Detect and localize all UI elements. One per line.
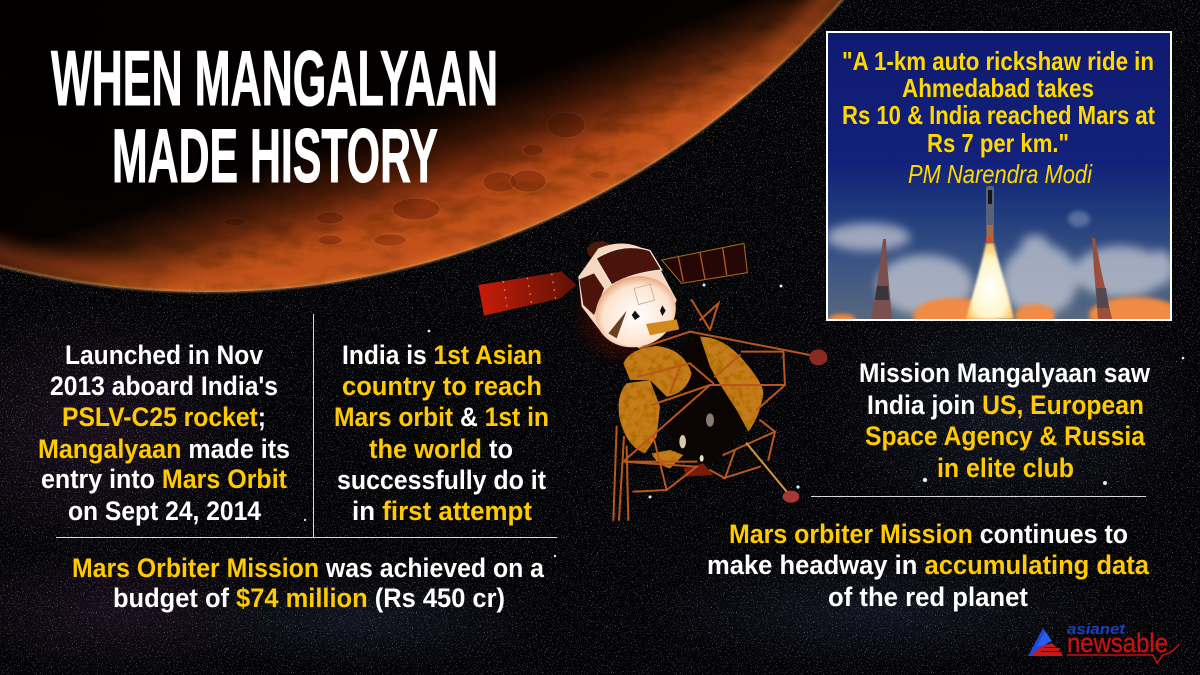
- launch photo: clouds, towers, rocket: [828, 186, 1170, 319]
- text block: launch: on Sept 24, 2014: [68, 496, 261, 526]
- landing frame and legs: [613, 300, 810, 520]
- quote text: [842, 46, 1155, 158]
- landing pads: [783, 349, 827, 503]
- text block: first Asian country: India is 1st Asian: [342, 340, 542, 370]
- logo: Asianet Newsable: [1028, 621, 1179, 663]
- logo: Asianet Newsable: asianet: [1067, 621, 1126, 638]
- quote attribution: PM Narendra Modi: [908, 159, 1093, 189]
- title: MADE HISTORY: [112, 114, 438, 199]
- text block: first Asian country: successfully do it: [337, 465, 546, 495]
- text block: accumulating data: make headway in accumulating data: [707, 550, 1150, 580]
- text block: first Asian country: [334, 340, 549, 526]
- text block: elite club: in elite club: [937, 453, 1074, 483]
- text block: accumulating data: [707, 519, 1150, 612]
- panel: PM Modi quote over rocket launch photo: [826, 31, 1181, 334]
- text block: launch: PSLV-C25 rocket;: [62, 402, 266, 432]
- text block: budget: [72, 553, 545, 613]
- text block: launch: [38, 340, 290, 526]
- text block: first Asian country: country to reach: [342, 371, 542, 401]
- quote text: Rs 10 & India reached Mars at: [842, 100, 1155, 130]
- text block: budget: Mars Orbiter Mission was achieved on a: [72, 553, 545, 583]
- icon: right solar panel: [662, 243, 747, 283]
- quote text: Ahmedabad takes: [902, 73, 1094, 103]
- text block: launch: Launched in Nov: [65, 340, 263, 370]
- spacecraft body: [578, 241, 685, 358]
- text block: launch: 2013 aboard India's: [50, 371, 278, 401]
- text block: elite club: India join US, European: [867, 390, 1144, 420]
- quote text: Rs 7 per km.": [927, 128, 1069, 158]
- text block: launch: entry into Mars Orbit: [41, 464, 287, 494]
- title: WHEN MANGALYAAN: [51, 34, 498, 122]
- text block: elite club: Mission Mangalyaan saw: [859, 358, 1151, 388]
- logo: Asianet Newsable: newsable: [1067, 628, 1168, 658]
- text block: elite club: [859, 358, 1151, 483]
- craters: [224, 112, 610, 246]
- text block: first Asian country: the world to: [369, 434, 513, 464]
- text block: first Asian country: Mars orbit & 1st in: [334, 402, 549, 432]
- spacecraft illustration: [478, 241, 827, 520]
- planet: Mars crescent: [0, 0, 842, 292]
- text block: launch: Mangalyaan made its: [38, 434, 290, 464]
- text block: budget: budget of $74 million (Rs 450 cr): [113, 583, 505, 613]
- text block: first Asian country: in first attempt: [352, 496, 532, 526]
- quote text: "A 1-km auto rickshaw ride in: [842, 46, 1154, 76]
- planet rim glow: [0, 0, 1044, 292]
- title: [51, 34, 498, 199]
- divider lines: [56, 314, 1146, 538]
- text block: accumulating data: Mars orbiter Mission continues to: [729, 519, 1128, 549]
- text block: elite club: Space Agency & Russia: [865, 421, 1146, 451]
- text block: accumulating data: of the red planet: [828, 582, 1028, 612]
- fuel tanks: [618, 337, 763, 468]
- icon: left solar panel: [478, 272, 577, 316]
- engine: [667, 335, 747, 473]
- engine nozzles: [679, 413, 714, 477]
